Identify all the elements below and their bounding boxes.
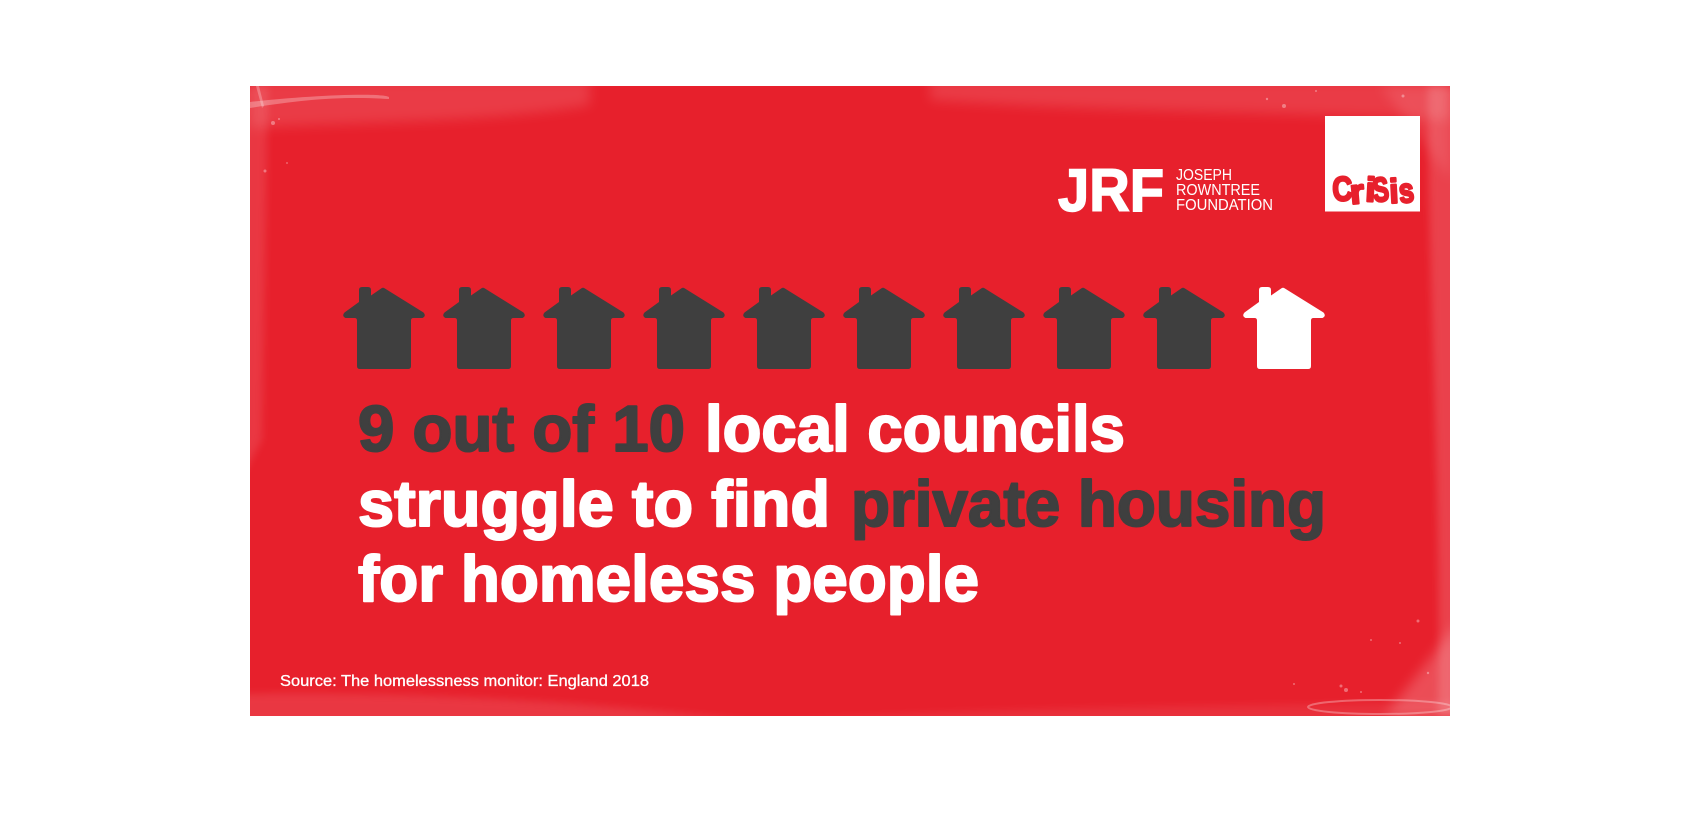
heading line 1 <box>358 392 1125 465</box>
logo name: three lines: ROWNTREE <box>1176 182 1260 199</box>
logo name: three lines <box>1176 167 1273 214</box>
logo name: three lines: FOUNDATION <box>1176 197 1273 214</box>
logo wordmark: Crisis: i <box>1365 171 1377 210</box>
logo name: three lines: JOSEPH <box>1176 167 1232 184</box>
icon: house 8 <box>1043 287 1125 369</box>
icon: house 4 <box>643 287 725 369</box>
icon: house 5 <box>743 287 825 369</box>
icon: house 3 <box>543 287 625 369</box>
heading line 2: struggle to find <box>358 467 830 540</box>
icon: house 7 <box>943 287 1025 369</box>
logo wordmark: Crisis <box>1331 170 1416 212</box>
heading: three-line statement <box>358 392 1326 615</box>
icon: house 2 <box>443 287 525 369</box>
panel: red background <box>240 80 1460 722</box>
heading line 2 <box>358 467 1326 540</box>
logo wordmark: Crisis: S <box>1371 170 1391 210</box>
logo: Joseph Rowntree Foundation <box>1058 157 1273 224</box>
logo mark: JRF: JRF <box>1058 157 1164 224</box>
icon: white house 10 <box>1243 287 1325 369</box>
logo wordmark: Crisis: C <box>1331 170 1353 209</box>
icon: house 9 <box>1143 287 1225 369</box>
heading line 2: private housing <box>851 467 1326 540</box>
icon: house 6 <box>843 287 925 369</box>
logo wordmark: Crisis: i <box>1388 173 1399 211</box>
heading line 1: local councils <box>705 392 1125 465</box>
icon row: ten houses, nine dark and one white <box>343 287 1325 369</box>
heading line 1: 9 out of 10 <box>358 392 685 465</box>
heading line 3: for homeless people <box>358 542 979 615</box>
icon: house 1 <box>343 287 425 369</box>
logo wordmark: Crisis: r <box>1348 173 1366 212</box>
logo: Crisis <box>1325 116 1420 212</box>
source note: Source: The homelessness monitor: England 2018 <box>280 673 649 690</box>
logo wordmark: Crisis: s <box>1397 172 1416 211</box>
